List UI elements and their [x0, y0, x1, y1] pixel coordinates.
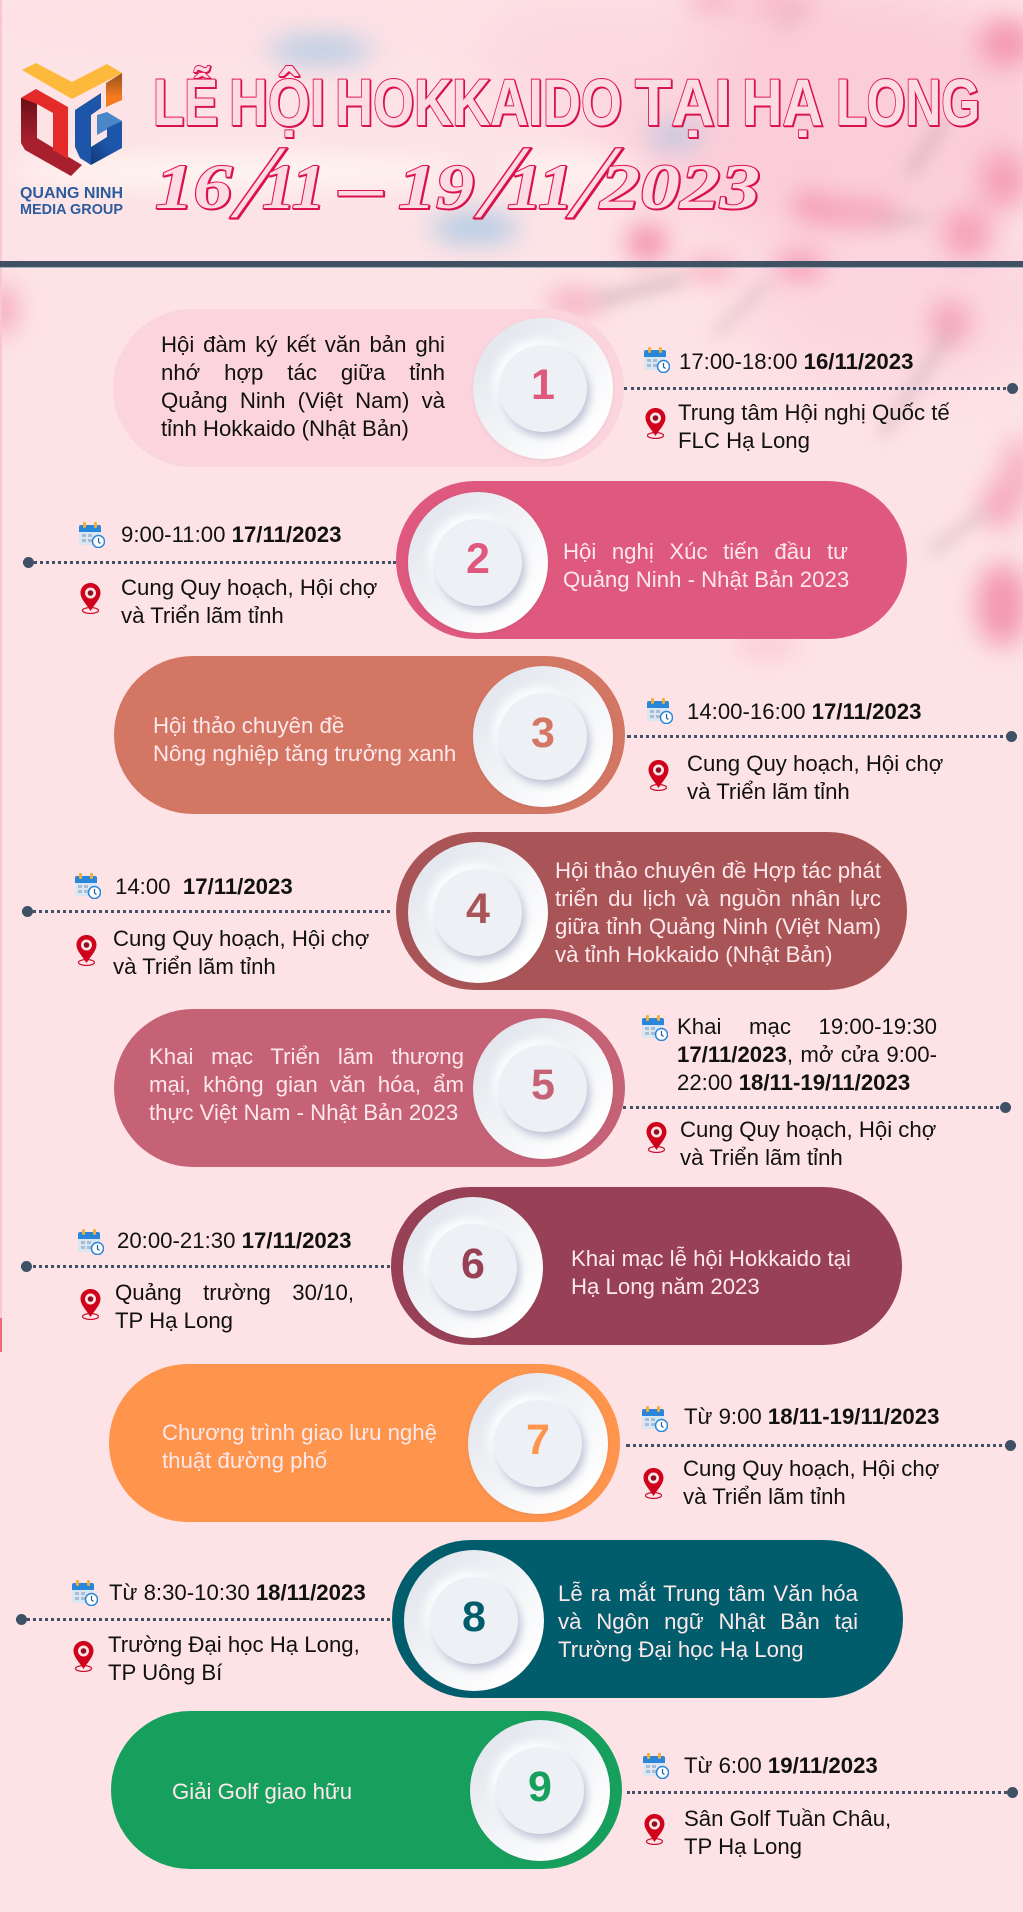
icon: location pin: [644, 1814, 665, 1845]
header divider: [0, 261, 1023, 268]
event 6 description: [571, 1246, 851, 1299]
connector 9: [627, 1787, 1018, 1798]
info: event 8 time and place: [72, 1579, 372, 1687]
number badge 8: 8: [462, 1593, 486, 1641]
info: event 5 time and place: [642, 1014, 937, 1170]
number badge 2: [408, 492, 548, 633]
number badge 3: [473, 666, 613, 807]
number badge 9: [470, 1720, 610, 1861]
info: event 2 time and place: [79, 481, 843, 639]
event 7 description: Chương trình giao lưu nghệ: [162, 1420, 437, 1445]
event 5 time: [677, 1014, 937, 1095]
event 1 description: [161, 332, 445, 441]
number badge 1: 1: [531, 361, 555, 409]
panel: event 2: [396, 481, 907, 639]
info: event 9 time and place: [643, 1752, 923, 1860]
date range heading: 11: [262, 151, 325, 222]
event 1 description: Quảng Ninh (Việt Nam) và: [161, 388, 445, 413]
title: LỄ: [153, 65, 218, 139]
number badge 1: [473, 318, 613, 459]
panel: event 9: [111, 1711, 622, 1869]
event 2 place: Cung Quy hoạch, Hội chợ: [121, 575, 377, 600]
info: event 7 time and place: [642, 1403, 952, 1511]
event 7 place: Cung Quy hoạch, Hội chợ: [683, 1456, 939, 1481]
event 4 place: Cung Quy hoạch, Hội chợ: [113, 926, 369, 951]
number badge 7: 7: [526, 1416, 550, 1464]
panel: event 1: [113, 309, 624, 467]
event 2 place: và Triển lãm tỉnh: [121, 603, 284, 628]
title: HỘI: [229, 65, 325, 139]
info: event 4 time and place: [75, 873, 369, 979]
title: TẠI: [635, 65, 731, 139]
title: HOKKAIDO: [335, 65, 622, 139]
number badge 4: [408, 842, 548, 983]
title: HẠ: [742, 65, 823, 139]
event 1 place: Trung tâm Hội nghị Quốc tế: [678, 400, 950, 425]
event 5 description: mại, không gian văn hóa, ẩm: [149, 1072, 464, 1097]
event 8 description: Trường Đại học Hạ Long: [558, 1637, 804, 1662]
icon: calendar: [644, 347, 670, 373]
info: event 3 time and place: [647, 698, 943, 804]
logo: Quang Ninh Media Group: QUANG NINH: [20, 185, 123, 202]
event 3 time: 14:00-16:00 17/11/2023: [687, 699, 921, 724]
icon: location pin: [80, 583, 100, 614]
event 2 description: Quảng Ninh - Nhật Bản 2023: [563, 567, 849, 592]
connector 2: [23, 557, 396, 568]
event 2 time: 9:00-11:00 17/11/2023: [121, 522, 341, 547]
event 3 place: [687, 751, 943, 804]
event 7 description: [162, 1419, 437, 1475]
icon: location pin: [76, 935, 96, 966]
event 3 description: Nông nghiệp tăng trưởng xanh: [153, 741, 456, 766]
icon: location pin: [646, 408, 666, 439]
date range heading: 16: [155, 151, 232, 222]
icon: location pin: [73, 1641, 94, 1672]
event 9 description: Giải Golf giao hữu: [172, 1779, 352, 1804]
connector 8: [16, 1614, 390, 1625]
event 4 description: Hội thảo chuyên đề Hợp tác phát: [555, 858, 881, 883]
panel: event 4: [396, 832, 907, 990]
event 6 description: Khai mạc lễ hội Hokkaido tại: [571, 1246, 851, 1271]
event 8 place: Trường Đại học Hạ Long,: [108, 1632, 360, 1657]
number badge 6: [403, 1197, 543, 1338]
icon: location pin: [643, 1468, 664, 1499]
event 4 description: triển du lịch và nguồn nhân lực: [555, 886, 881, 911]
icon: location pin: [648, 760, 668, 791]
event 5 description: [149, 1044, 464, 1125]
event 4 description: [555, 858, 881, 967]
event 2 place: [121, 575, 377, 628]
event 5 time: 17/11/2023, mở cửa 9:00-: [677, 1042, 937, 1067]
event 1 description: nhớ hợp tác giữa tỉnh: [161, 360, 445, 385]
connector 1: [624, 383, 1018, 394]
logo: Quang Ninh Media Group: MEDIA GROUP: [20, 201, 123, 218]
logo: Quang Ninh Media Group: [20, 63, 123, 218]
event 6 description: Hạ Long năm 2023: [571, 1274, 760, 1299]
event 8 description: và Ngôn ngữ Nhật Bản tại: [558, 1609, 858, 1634]
icon: location pin: [80, 1289, 101, 1320]
icon: location pin: [646, 1122, 666, 1153]
event 5 description: Khai mạc Triển lãm thương: [149, 1044, 464, 1069]
event 6 time: 20:00-21:30 17/11/2023: [117, 1228, 351, 1253]
connector 5: [623, 1102, 1011, 1113]
event 8 description: Lễ ra mắt Trung tâm Văn hóa: [558, 1581, 858, 1606]
number badge 3: 3: [531, 709, 555, 757]
date range heading: –: [337, 151, 383, 222]
event 3 place: Cung Quy hoạch, Hội chợ: [687, 751, 943, 776]
connector 3: [627, 731, 1017, 742]
icon: calendar: [642, 1406, 668, 1432]
event 6 place: TP Hạ Long: [115, 1308, 233, 1333]
number badge 9: 9: [528, 1763, 552, 1811]
number badge 5: [473, 1018, 613, 1159]
event 8 time: Từ 8:30-10:30 18/11/2023: [109, 1580, 366, 1605]
event 5 time: Khai mạc 19:00-19:30: [677, 1014, 937, 1039]
date range heading: 11: [507, 151, 573, 222]
event 6 place: [115, 1279, 354, 1335]
event 7 description: thuật đường phố: [162, 1448, 327, 1473]
icon: calendar: [647, 698, 673, 724]
title: [153, 65, 980, 202]
event 8 place: [108, 1631, 360, 1687]
event 9 place: TP Hạ Long: [684, 1834, 802, 1859]
event 5 description: thực Việt Nam - Nhật Bản 2023: [149, 1100, 458, 1125]
event 7 place: [683, 1455, 939, 1511]
connector 6: [21, 1261, 390, 1272]
icon: calendar: [642, 1015, 668, 1041]
event 7 place: và Triển lãm tỉnh: [683, 1484, 846, 1509]
event 1 place: [678, 400, 950, 453]
event 3 place: và Triển lãm tỉnh: [687, 779, 850, 804]
event 8 place: TP Uông Bí: [108, 1660, 222, 1685]
number badge 8: [404, 1550, 544, 1691]
number badge 7: [468, 1373, 608, 1514]
panel: event 5: [114, 1009, 625, 1167]
event 8 description: [558, 1580, 858, 1664]
connector 4: [22, 906, 390, 917]
number badge 5: 5: [531, 1061, 555, 1109]
event 9 place: Sân Golf Tuần Châu,: [684, 1806, 891, 1831]
icon: calendar: [78, 1229, 104, 1255]
event 5 place: [680, 1117, 936, 1170]
event 1 time: 17:00-18:00 16/11/2023: [679, 349, 913, 374]
event 4 place: [113, 926, 369, 979]
icon: calendar: [79, 522, 105, 548]
event 9 place: [684, 1805, 891, 1861]
number badge 6: 6: [461, 1240, 485, 1288]
event 3 description: [153, 713, 456, 766]
info: event 6 time and place: [78, 1227, 358, 1335]
date range heading: 19: [398, 151, 474, 222]
panel: event 6: [391, 1187, 902, 1345]
panel: event 8: [392, 1540, 903, 1698]
date range heading: [155, 140, 760, 230]
event 5 time: 22:00 18/11-19/11/2023: [677, 1070, 910, 1095]
event 6 place: Quảng trường 30/10,: [115, 1280, 354, 1305]
icon: calendar: [643, 1753, 669, 1779]
number badge 4: 4: [466, 885, 490, 933]
event 9 time: Từ 6:00 19/11/2023: [684, 1753, 878, 1778]
number badge 2: 2: [466, 535, 490, 583]
event 4 time: 14:00 17/11/2023: [115, 874, 293, 899]
event 1 place: FLC Hạ Long: [678, 428, 810, 453]
event 4 description: và tỉnh Hokkaido (Nhật Bản): [555, 942, 832, 967]
icon: calendar: [75, 873, 101, 899]
event 3 description: Hội thảo chuyên đề: [153, 713, 344, 738]
icon: calendar: [72, 1580, 98, 1606]
event 2 description: Hội nghị Xúc tiến đầu tư: [563, 539, 848, 564]
event 1 description: Hội đàm ký kết văn bản ghi: [161, 332, 445, 357]
event 5 place: và Triển lãm tỉnh: [680, 1145, 843, 1170]
event 4 place: và Triển lãm tỉnh: [113, 954, 276, 979]
event 1 description: tỉnh Hokkaido (Nhật Bản): [161, 416, 409, 441]
connector 7: [626, 1440, 1016, 1451]
panel: event 3: [114, 656, 625, 814]
panel: event 7: [109, 1364, 620, 1522]
event 2 description: [563, 539, 849, 592]
date range heading: 2023: [599, 151, 760, 222]
info: event 1 time and place: [644, 347, 950, 453]
event 4 description: giữa tỉnh Quảng Ninh (Việt Nam): [555, 914, 881, 939]
event 7 time: Từ 9:00 18/11-19/11/2023: [684, 1404, 939, 1429]
event 5 place: Cung Quy hoạch, Hội chợ: [680, 1117, 936, 1142]
